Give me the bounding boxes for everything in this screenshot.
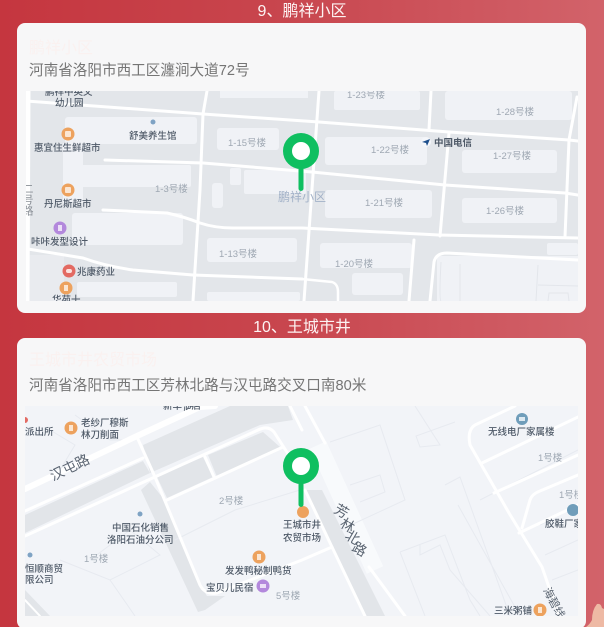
heading: 10: 10、王城市井 (253, 319, 351, 336)
building labels: 1-27号楼 (493, 150, 532, 162)
address: 河南省洛阳市西工区芳林北路与汉屯路交叉口南80米 (29, 378, 366, 394)
POI labels (31, 86, 473, 306)
road labels: 北 (342, 527, 363, 548)
POI labels: 洛阳石油分公司 (107, 534, 174, 546)
building labels: 1-21号楼 (365, 197, 404, 209)
POI icons (54, 120, 431, 294)
building labels: 5号楼 (276, 590, 301, 602)
map pin (288, 452, 314, 507)
POI labels: 恒顺商贸 (25, 563, 63, 575)
road network (25, 406, 578, 616)
POI labels: 宝贝儿民宿 (206, 582, 254, 594)
building labels: 1-13号楼 (219, 248, 258, 260)
POI icons (22, 413, 579, 616)
POI labels: 农贸市场 (283, 532, 321, 544)
building labels: 2号楼 (219, 495, 244, 507)
POI labels: 咔咔发型设计 (31, 236, 89, 248)
address: 河南省洛阳市西工区瀍涧大道72号 (29, 63, 250, 79)
building labels: 1-20号楼 (335, 258, 374, 270)
POI labels: 惠宜住生鲜超市 (34, 142, 101, 154)
building labels (84, 452, 584, 602)
building labels (155, 89, 535, 270)
POI labels: 兆康药业 (77, 266, 115, 278)
heading: 9: 9、鹏祥小区 (258, 3, 346, 20)
map: community 9 (26, 91, 578, 301)
building labels: 1-28号楼 (496, 106, 535, 118)
map place label: 鹏祥小区 (278, 190, 326, 204)
POI labels (25, 400, 584, 617)
map: community 10 (25, 406, 578, 616)
POI labels: 丹尼斯超市 (44, 198, 92, 210)
road labels: 汉屯路 (47, 451, 92, 484)
thin inner lines (440, 262, 578, 301)
pale road strip (318, 445, 375, 570)
building labels: 1号楼 (84, 553, 109, 565)
panel: community 10 (17, 338, 586, 627)
building labels: 1-3号楼 (155, 183, 188, 195)
map pin (288, 138, 314, 191)
grey bands (25, 406, 385, 616)
road labels: 芳 (332, 501, 352, 522)
POI labels: 中国石化销售 (112, 522, 169, 534)
building labels: 1-26号楼 (486, 205, 525, 217)
POI labels: 派出所 (25, 426, 54, 438)
road labels: 路 (350, 539, 370, 560)
building labels: 1号楼 (538, 452, 563, 464)
community name: 鹏祥小区 (29, 40, 93, 57)
thin building outlines (50, 406, 578, 616)
POI labels: 舒美养生馆 (129, 130, 177, 142)
icon: thumb corner decoration (586, 604, 604, 627)
light building blocks (28, 91, 578, 301)
POI labels: 幼儿园 (55, 97, 84, 109)
panel: community 9 (17, 23, 586, 313)
POI labels: 发发鸭秘制鸭货 (225, 565, 292, 577)
POI labels: 无线电厂家属楼 (488, 426, 555, 438)
building labels: 1-22号楼 (371, 144, 410, 156)
road network (26, 91, 578, 301)
road labels: 林 (338, 515, 358, 536)
POI labels: 限公司 (25, 575, 54, 586)
POI labels: 林刀削面 (81, 429, 120, 441)
POI labels: 王城市井 (283, 519, 321, 531)
market name: 王城市井农贸市场 (29, 352, 157, 369)
POI labels: 老纱厂穆斯 (81, 417, 129, 429)
building labels: 1-15号楼 (228, 137, 267, 149)
POI labels: 中国电信 (434, 137, 473, 149)
road labels (47, 396, 568, 621)
